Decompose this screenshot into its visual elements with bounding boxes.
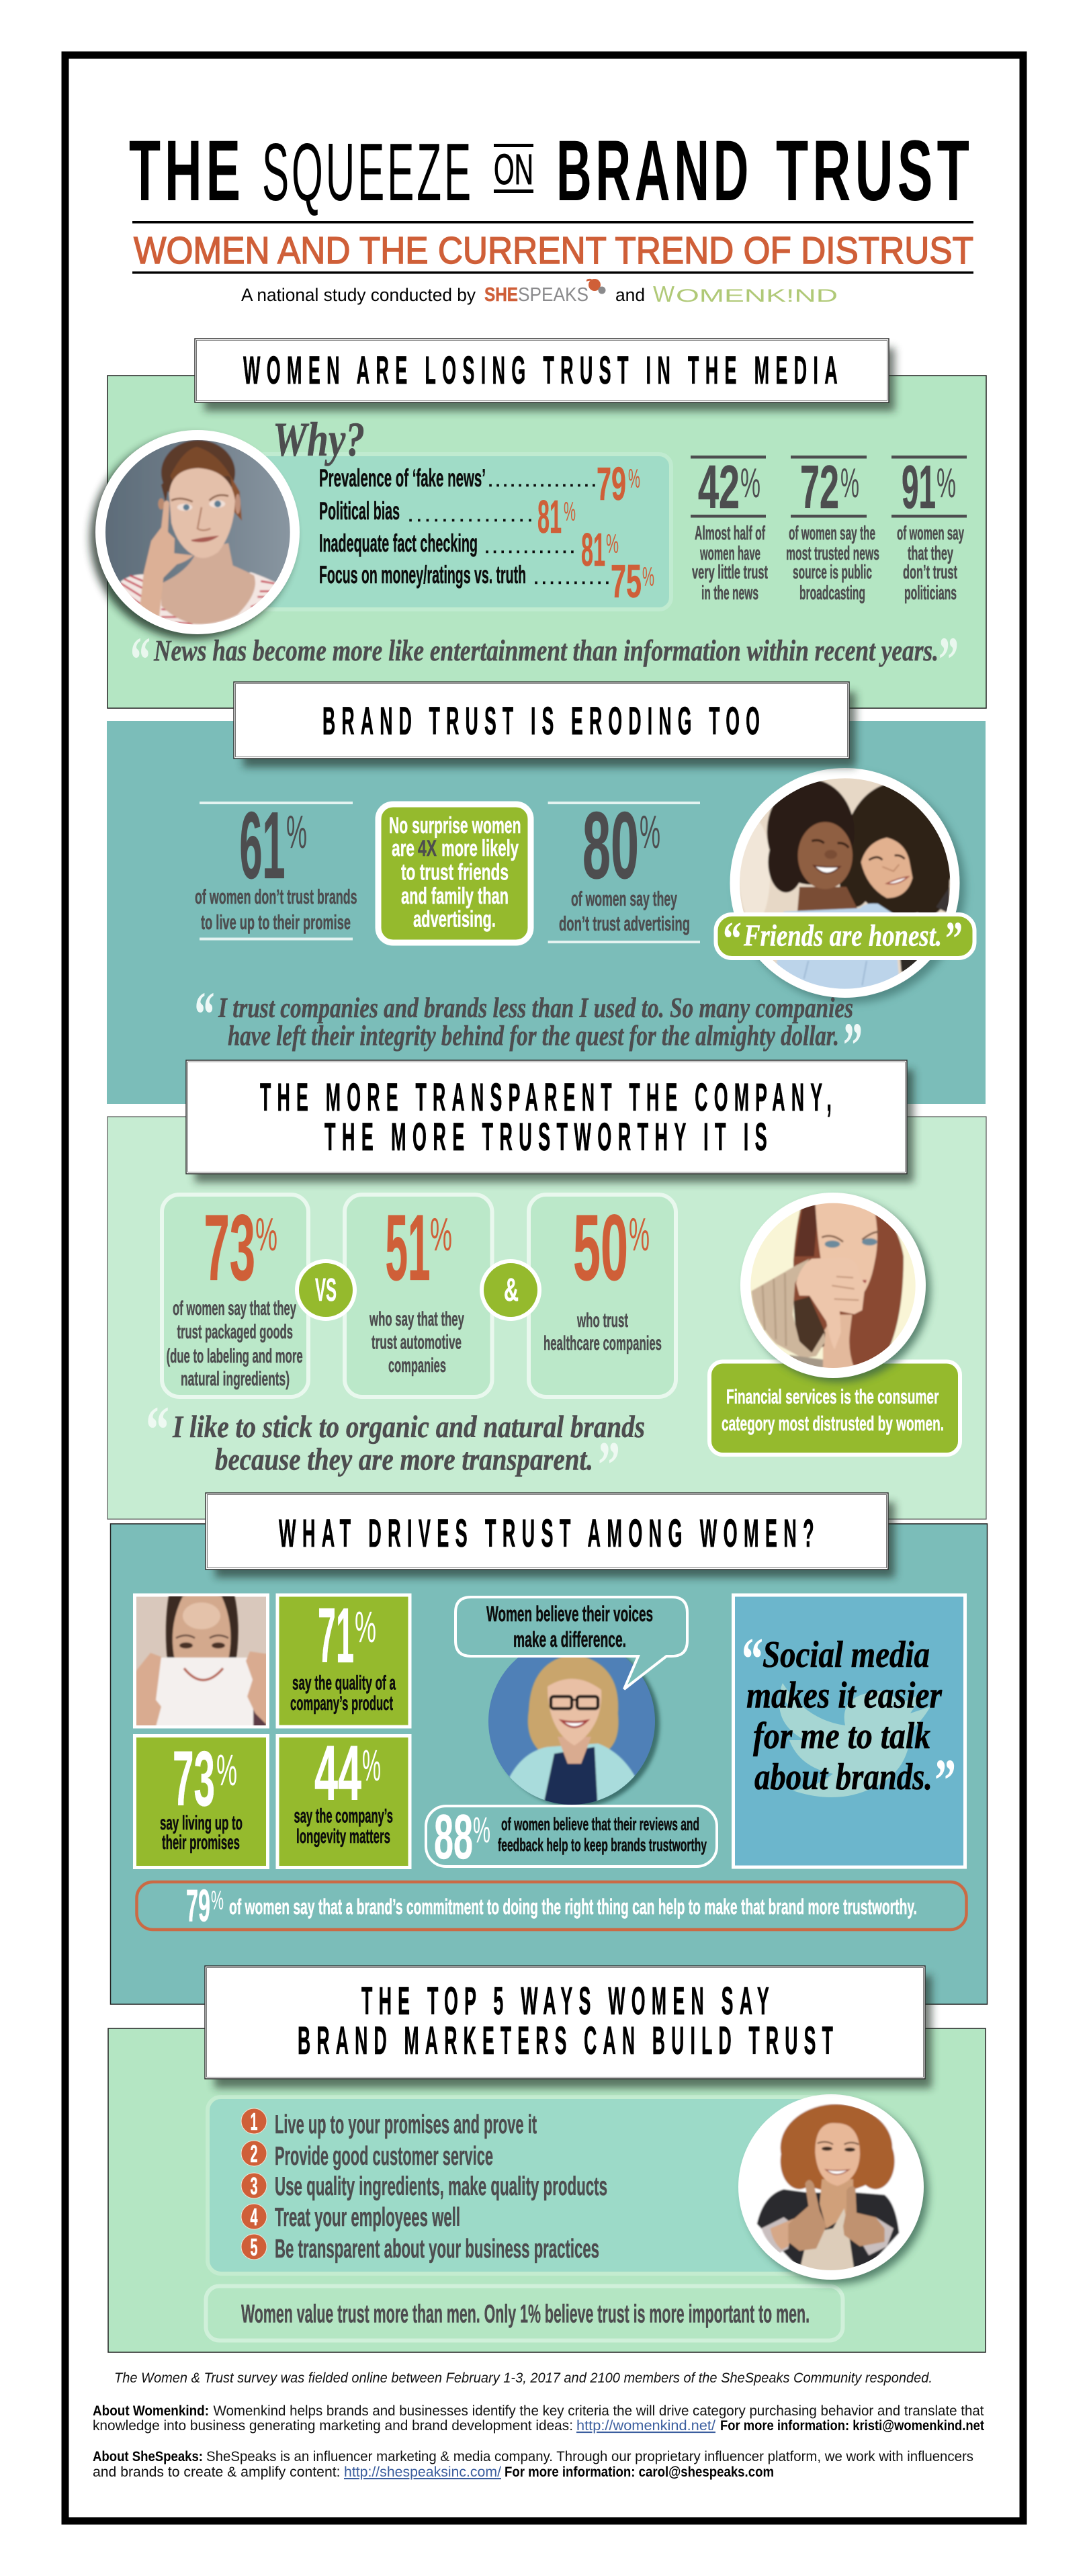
badge: ampersand: & xyxy=(504,1273,519,1308)
subtitle: WOMEN AND THE CURRENT TREND OF DISTRUST xyxy=(134,229,973,272)
tile: social media quote: about brands. xyxy=(754,1756,932,1798)
tile: 73%: say living up to xyxy=(160,1812,243,1834)
stat: 91%: don’t trust xyxy=(903,562,957,583)
tile: 71%: 71 xyxy=(318,1592,354,1679)
title: trust: TRUST xyxy=(776,123,973,219)
reason list: 81 xyxy=(581,523,605,576)
card: 73%: % xyxy=(255,1208,277,1260)
tile: 44% xyxy=(277,1729,410,1868)
stat pill: 88%: of women believe that their reviews and xyxy=(501,1814,699,1834)
reason list: 79 xyxy=(597,458,626,510)
reason list: ............... xyxy=(488,473,596,490)
tile: social media quote: “ xyxy=(742,1626,763,1692)
about shespeaks: SheSpeaks is an influencer marketing & media company. Through our proprietary influencer platform, we work with influencers xyxy=(206,2449,973,2464)
stat: 42% xyxy=(691,454,768,604)
speech bubble xyxy=(455,1597,687,1689)
quote: integrity xyxy=(195,978,863,1081)
why list box xyxy=(222,454,671,609)
stat: 91%: of women say xyxy=(897,523,964,544)
about womenkind: http://womenkind.net/ xyxy=(576,2418,715,2434)
callout: 4x: advertising. xyxy=(413,907,496,933)
item 1 xyxy=(241,2108,537,2139)
ranked list xyxy=(241,2108,607,2264)
stat: 91%: 91 xyxy=(902,454,936,521)
stat: 91%: % xyxy=(936,460,956,507)
card: 73%: (due to labeling and more xyxy=(167,1345,303,1367)
tile: 71% xyxy=(277,1592,410,1727)
callout: doing the right thing xyxy=(137,1880,966,1931)
stat: 42%: 42 xyxy=(698,454,740,521)
study credit: and xyxy=(615,285,645,305)
callout pill: friends are honest: “ xyxy=(723,912,742,965)
quote: news: ” xyxy=(939,624,959,695)
quote: organic: I like to stick to organic and natural brands xyxy=(172,1410,645,1445)
heading: brand trust is eroding xyxy=(234,682,856,767)
stat: 72%: 72 xyxy=(800,454,839,521)
item 5 xyxy=(241,2233,599,2264)
stat: 91%: that they xyxy=(908,543,953,564)
tile: 44%: 44 xyxy=(314,1729,361,1817)
tile: 73%: 73 xyxy=(173,1735,215,1822)
panel: media trust xyxy=(90,376,986,708)
reason list: Inadequate fact checking xyxy=(319,529,478,557)
logo: womenkind: W xyxy=(653,282,675,306)
quote: news: “ xyxy=(130,624,150,695)
heading: what drives trust xyxy=(206,1493,895,1578)
quote: integrity: ” xyxy=(843,1009,863,1081)
card: 51%: % xyxy=(430,1208,452,1260)
item 5: 5 xyxy=(250,2233,258,2261)
panel: brand trust xyxy=(107,721,986,1104)
card: 50%: % xyxy=(629,1208,650,1260)
footer xyxy=(93,2370,984,2480)
photo: two friends xyxy=(716,768,974,1003)
callout: financial services xyxy=(709,1361,960,1455)
stat pill: 88%: feedback help to keep brands trustworthy xyxy=(498,1835,707,1855)
item 2: 2 xyxy=(250,2140,258,2167)
stat: 72%: of women say the xyxy=(789,523,875,544)
logo: womenkind xyxy=(653,282,838,306)
badge: vs: VS xyxy=(315,1273,337,1308)
stat: 80%: % xyxy=(640,806,660,858)
reason list: 75 xyxy=(611,555,642,607)
reason list xyxy=(319,458,654,607)
callout: 4x: and family than xyxy=(401,884,509,909)
survey note: The Women & Trust survey was fielded online between February 1-3, 2017 and 2100 members of the SheSpeaks Community responded. xyxy=(114,2370,932,2386)
tile: social media quote xyxy=(734,1595,965,1867)
card: 51%: who say that they xyxy=(369,1308,464,1330)
logo: shespeaks xyxy=(484,279,606,306)
quote: integrity: I trust companies and brands less than I used to. So many companies xyxy=(218,993,853,1024)
item 5: Be transparent about your business practices xyxy=(275,2235,599,2264)
card: 51%: 51 xyxy=(386,1195,430,1300)
stat: 61%: to live up to their promise xyxy=(201,910,351,934)
stat pill: 88%: 88 xyxy=(434,1801,473,1872)
about shespeaks: and brands to create & amplify content: xyxy=(93,2464,340,2480)
badge: vs xyxy=(297,1261,355,1319)
stat pill: 88% xyxy=(426,1801,717,1872)
quote: news xyxy=(130,624,959,695)
reason list: % xyxy=(564,497,576,527)
about shespeaks xyxy=(93,2449,973,2480)
tile: 44%: say the company’s xyxy=(294,1805,393,1828)
callout: financial services: category most distrusted by women. xyxy=(722,1412,944,1435)
card: 50%: healthcare companies xyxy=(543,1332,662,1355)
tile: 44%: % xyxy=(362,1740,381,1790)
callout: doing the right thing: % xyxy=(211,1886,224,1916)
title: SQUEEZE xyxy=(262,126,474,218)
title xyxy=(129,123,973,219)
reason list: ............ xyxy=(485,540,574,556)
speech bubble: Women believe their voices xyxy=(486,1602,653,1626)
tile: social media quote: makes it easier xyxy=(746,1675,943,1717)
stat: 61%: of women don’t trust brands xyxy=(195,885,357,908)
tile: 73%: % xyxy=(216,1745,237,1795)
card: 73%: of women say that they xyxy=(173,1297,296,1320)
tile: 71%: say the quality of a xyxy=(292,1672,396,1694)
title: on: ON xyxy=(494,145,533,194)
badge: ampersand xyxy=(482,1261,539,1319)
about womenkind: For more information: kristi@womenkind.net xyxy=(720,2418,984,2434)
photo: thumbs up xyxy=(738,2094,928,2284)
stat: 80%: of women say they xyxy=(571,887,677,910)
stat: 72%: source is public xyxy=(793,562,872,583)
stat: 42%: Almost half of xyxy=(695,523,765,544)
reason list: ............... xyxy=(408,508,532,525)
reason list: % xyxy=(642,562,654,592)
reason list: % xyxy=(606,529,619,559)
tile: 71%: % xyxy=(355,1602,376,1651)
callout pill: friends are honest xyxy=(716,912,974,965)
about womenkind xyxy=(93,2403,984,2434)
photo: thumbs down xyxy=(740,1193,930,1382)
item 4: Treat your employees well xyxy=(275,2203,460,2232)
item 1: Live up to your promises and prove it xyxy=(275,2110,537,2139)
stat: 72%: broadcasting xyxy=(799,583,865,604)
reason list: % xyxy=(628,464,640,494)
why heading: Why? xyxy=(273,413,365,466)
heading: top 5 ways xyxy=(205,1966,932,2088)
tile: social media quote: for me to talk xyxy=(753,1715,930,1757)
callout: 4x: No surprise women xyxy=(389,813,521,839)
about shespeaks: About SheSpeaks: xyxy=(93,2449,203,2464)
quote: organic xyxy=(146,1392,645,1502)
tile: social media quote: Social media xyxy=(763,1634,930,1676)
tile: social media quote: ” xyxy=(934,1748,956,1814)
heading: women are losing trust xyxy=(195,339,895,411)
quote: integrity: have left their integrity behind for the quest for the almighty dollar. xyxy=(228,1021,839,1052)
card: 50%: 50 xyxy=(573,1195,628,1300)
item 3: 3 xyxy=(250,2172,258,2200)
card: 73%: natural ingredients) xyxy=(181,1368,290,1390)
stat: 80%: don’t trust advertising xyxy=(559,912,690,935)
about womenkind: Womenkind helps brands and businesses identify the key criteria the will drive category purchasing behavior and translate that xyxy=(214,2403,984,2419)
card: 51%: trust automotive xyxy=(372,1332,462,1354)
reason list: .......... xyxy=(534,570,609,587)
about shespeaks: For more information: carol@shespeaks.com xyxy=(505,2464,774,2480)
quote: organic: ” xyxy=(598,1428,620,1502)
logo: shespeaks: SHE xyxy=(484,284,518,306)
stat: 61%: % xyxy=(286,806,307,858)
heading: more transparent xyxy=(186,1060,914,1183)
quote: integrity: “ xyxy=(195,978,215,1050)
item 3: Use quality ingredients, make quality products xyxy=(275,2172,607,2201)
photo: thinking woman xyxy=(90,430,300,640)
stat: 91% xyxy=(891,454,967,604)
stat: 91%: politicians xyxy=(904,583,957,604)
stat pill: 88%: % xyxy=(473,1810,490,1850)
icon: bird xyxy=(779,1683,930,1797)
quote: organic: because they are more transparent. xyxy=(215,1442,593,1477)
item 4 xyxy=(241,2203,460,2232)
stat: 42%: women have xyxy=(699,543,760,564)
card: 51% xyxy=(345,1195,492,1397)
title: the: THE xyxy=(129,123,245,219)
panel: transparency xyxy=(107,1117,986,1519)
stat: 42%: very little trust xyxy=(692,562,768,583)
stat: 80%: 80 xyxy=(582,792,639,899)
logo: shespeaks: SPEAKS xyxy=(518,284,589,306)
item 1: 1 xyxy=(250,2108,258,2135)
card: 50%: who trust xyxy=(576,1310,628,1332)
study credit xyxy=(241,279,838,306)
stat: 61% xyxy=(195,792,357,941)
callout: 4x: to trust friends xyxy=(401,860,509,886)
stat: 61%: 61 xyxy=(239,792,285,899)
panel: what drives trust xyxy=(110,1524,988,2004)
stat: 42%: % xyxy=(740,460,760,507)
tile: 71%: company’s product xyxy=(290,1692,393,1715)
tile: 73% xyxy=(134,1735,267,1868)
callout: 4x: 4X xyxy=(418,836,437,861)
title: brand: BRAND xyxy=(556,123,752,219)
stat: 72% xyxy=(786,454,879,604)
stat: 80% xyxy=(548,792,700,943)
callout pill: friends are honest: ” xyxy=(945,912,963,965)
photo: woman in glasses xyxy=(488,1658,662,1805)
reason list: Focus on money/ratings vs. truth xyxy=(319,561,526,589)
stat: 42%: in the news xyxy=(701,583,758,604)
callout: doing the right thing: 79 xyxy=(186,1880,210,1931)
callout: financial services: Financial services is the consumer xyxy=(726,1385,939,1408)
about shespeaks: http://shespeaksinc.com/ xyxy=(344,2464,501,2480)
callout: 4x: are xyxy=(392,836,415,861)
item 4: 4 xyxy=(250,2203,258,2231)
quote: organic: “ xyxy=(146,1392,169,1467)
photo tile: smile card xyxy=(134,1592,269,1727)
list box xyxy=(208,2097,826,2274)
stat: 72%: % xyxy=(840,460,859,507)
callout: 4x: more likely xyxy=(441,836,519,861)
about womenkind: knowledge into business generating marketing and brand development ideas: xyxy=(93,2418,573,2434)
item 2: Provide good customer service xyxy=(275,2142,493,2171)
callout: women value trust xyxy=(206,2286,842,2341)
logo: womenkind: OMENK!ND xyxy=(676,286,838,306)
callout: 4x xyxy=(378,804,531,943)
tile: 44%: longevity matters xyxy=(296,1826,390,1848)
title: on xyxy=(494,144,533,194)
callout pill: friends are honest: Friends are honest. xyxy=(743,918,942,953)
card: 73%: 73 xyxy=(204,1195,255,1300)
panel: top 5 ways xyxy=(108,2028,986,2352)
study credit: A national study conducted by xyxy=(241,285,476,305)
reason list: Prevalence of ‘fake news’ xyxy=(319,464,486,492)
card: 50% xyxy=(529,1195,676,1397)
card: 73% xyxy=(162,1195,308,1397)
card: 73%: trust packaged goods xyxy=(177,1321,293,1343)
reason list: Political bias xyxy=(319,497,400,525)
speech bubble: make a difference. xyxy=(513,1627,626,1651)
tile: 73%: their promises xyxy=(162,1832,240,1854)
item 2 xyxy=(241,2140,493,2171)
reason list: 81 xyxy=(537,490,562,543)
item 3 xyxy=(241,2172,607,2201)
about womenkind: About Womenkind: xyxy=(93,2403,209,2419)
stat: 72%: most trusted news xyxy=(786,543,879,564)
card: 51%: companies xyxy=(388,1355,446,1377)
